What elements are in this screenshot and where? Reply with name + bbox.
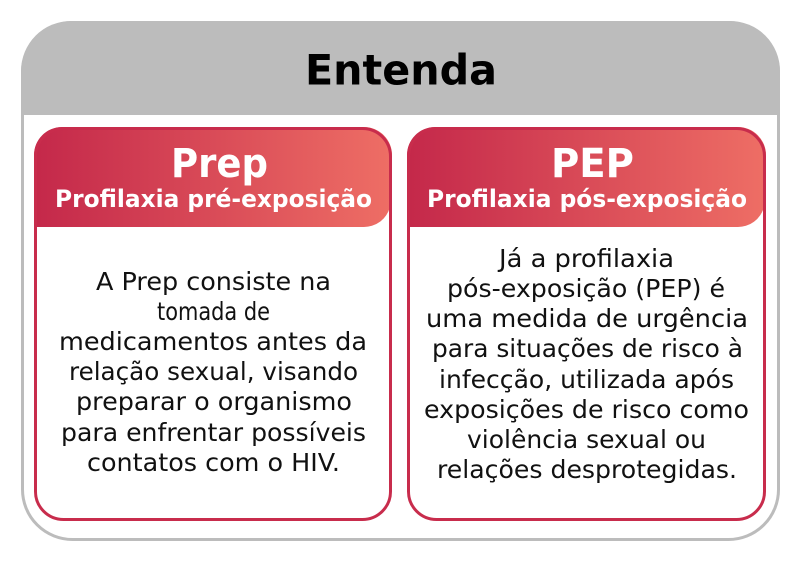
- text block: Prep description: preparar o organismo: [76, 387, 352, 416]
- panel: PEP: [407, 127, 766, 520]
- text block: Prep description: relação sexual, visando: [69, 357, 358, 386]
- text block: Prep description: [59, 267, 367, 477]
- panel: Prep: [34, 127, 392, 520]
- text block: PEP description: violência sexual ou: [467, 425, 706, 454]
- card header: Prep: [34, 127, 392, 227]
- text block: PEP description: exposições de risco como: [424, 395, 749, 424]
- text block: PEP description: para situações de risco à: [432, 334, 743, 363]
- text block: Prep description: A Prep consiste na: [96, 267, 331, 296]
- card header: PEP: [407, 127, 766, 227]
- text block: Prep description: para enfrentar possíveis: [61, 418, 366, 447]
- text block: PEP description: [424, 244, 749, 484]
- text block: PEP description: pós-exposição (PEP) é: [447, 274, 725, 303]
- text block: Prep description: contatos com o HIV.: [87, 448, 340, 477]
- card header: PEP: PEP: [551, 141, 634, 187]
- card header: Prep: Profilaxia pré-exposição: [55, 185, 372, 213]
- card header: PEP: Profilaxia pós-exposição: [427, 185, 747, 213]
- heading band: Entenda: [21, 21, 780, 115]
- text block: Prep description: medicamentos antes da: [59, 327, 367, 356]
- text block: Prep description: tomada de: [157, 297, 270, 326]
- text block: PEP description: Já a profilaxia: [497, 244, 674, 273]
- text block: PEP description: uma medida de urgência: [426, 304, 748, 333]
- card header: Prep: Prep: [171, 141, 268, 187]
- text block: PEP description: infecção, utilizada após: [439, 365, 734, 394]
- text block: PEP description: relações desprotegidas.: [437, 455, 737, 484]
- heading band: Entenda: Entenda: [305, 46, 497, 94]
